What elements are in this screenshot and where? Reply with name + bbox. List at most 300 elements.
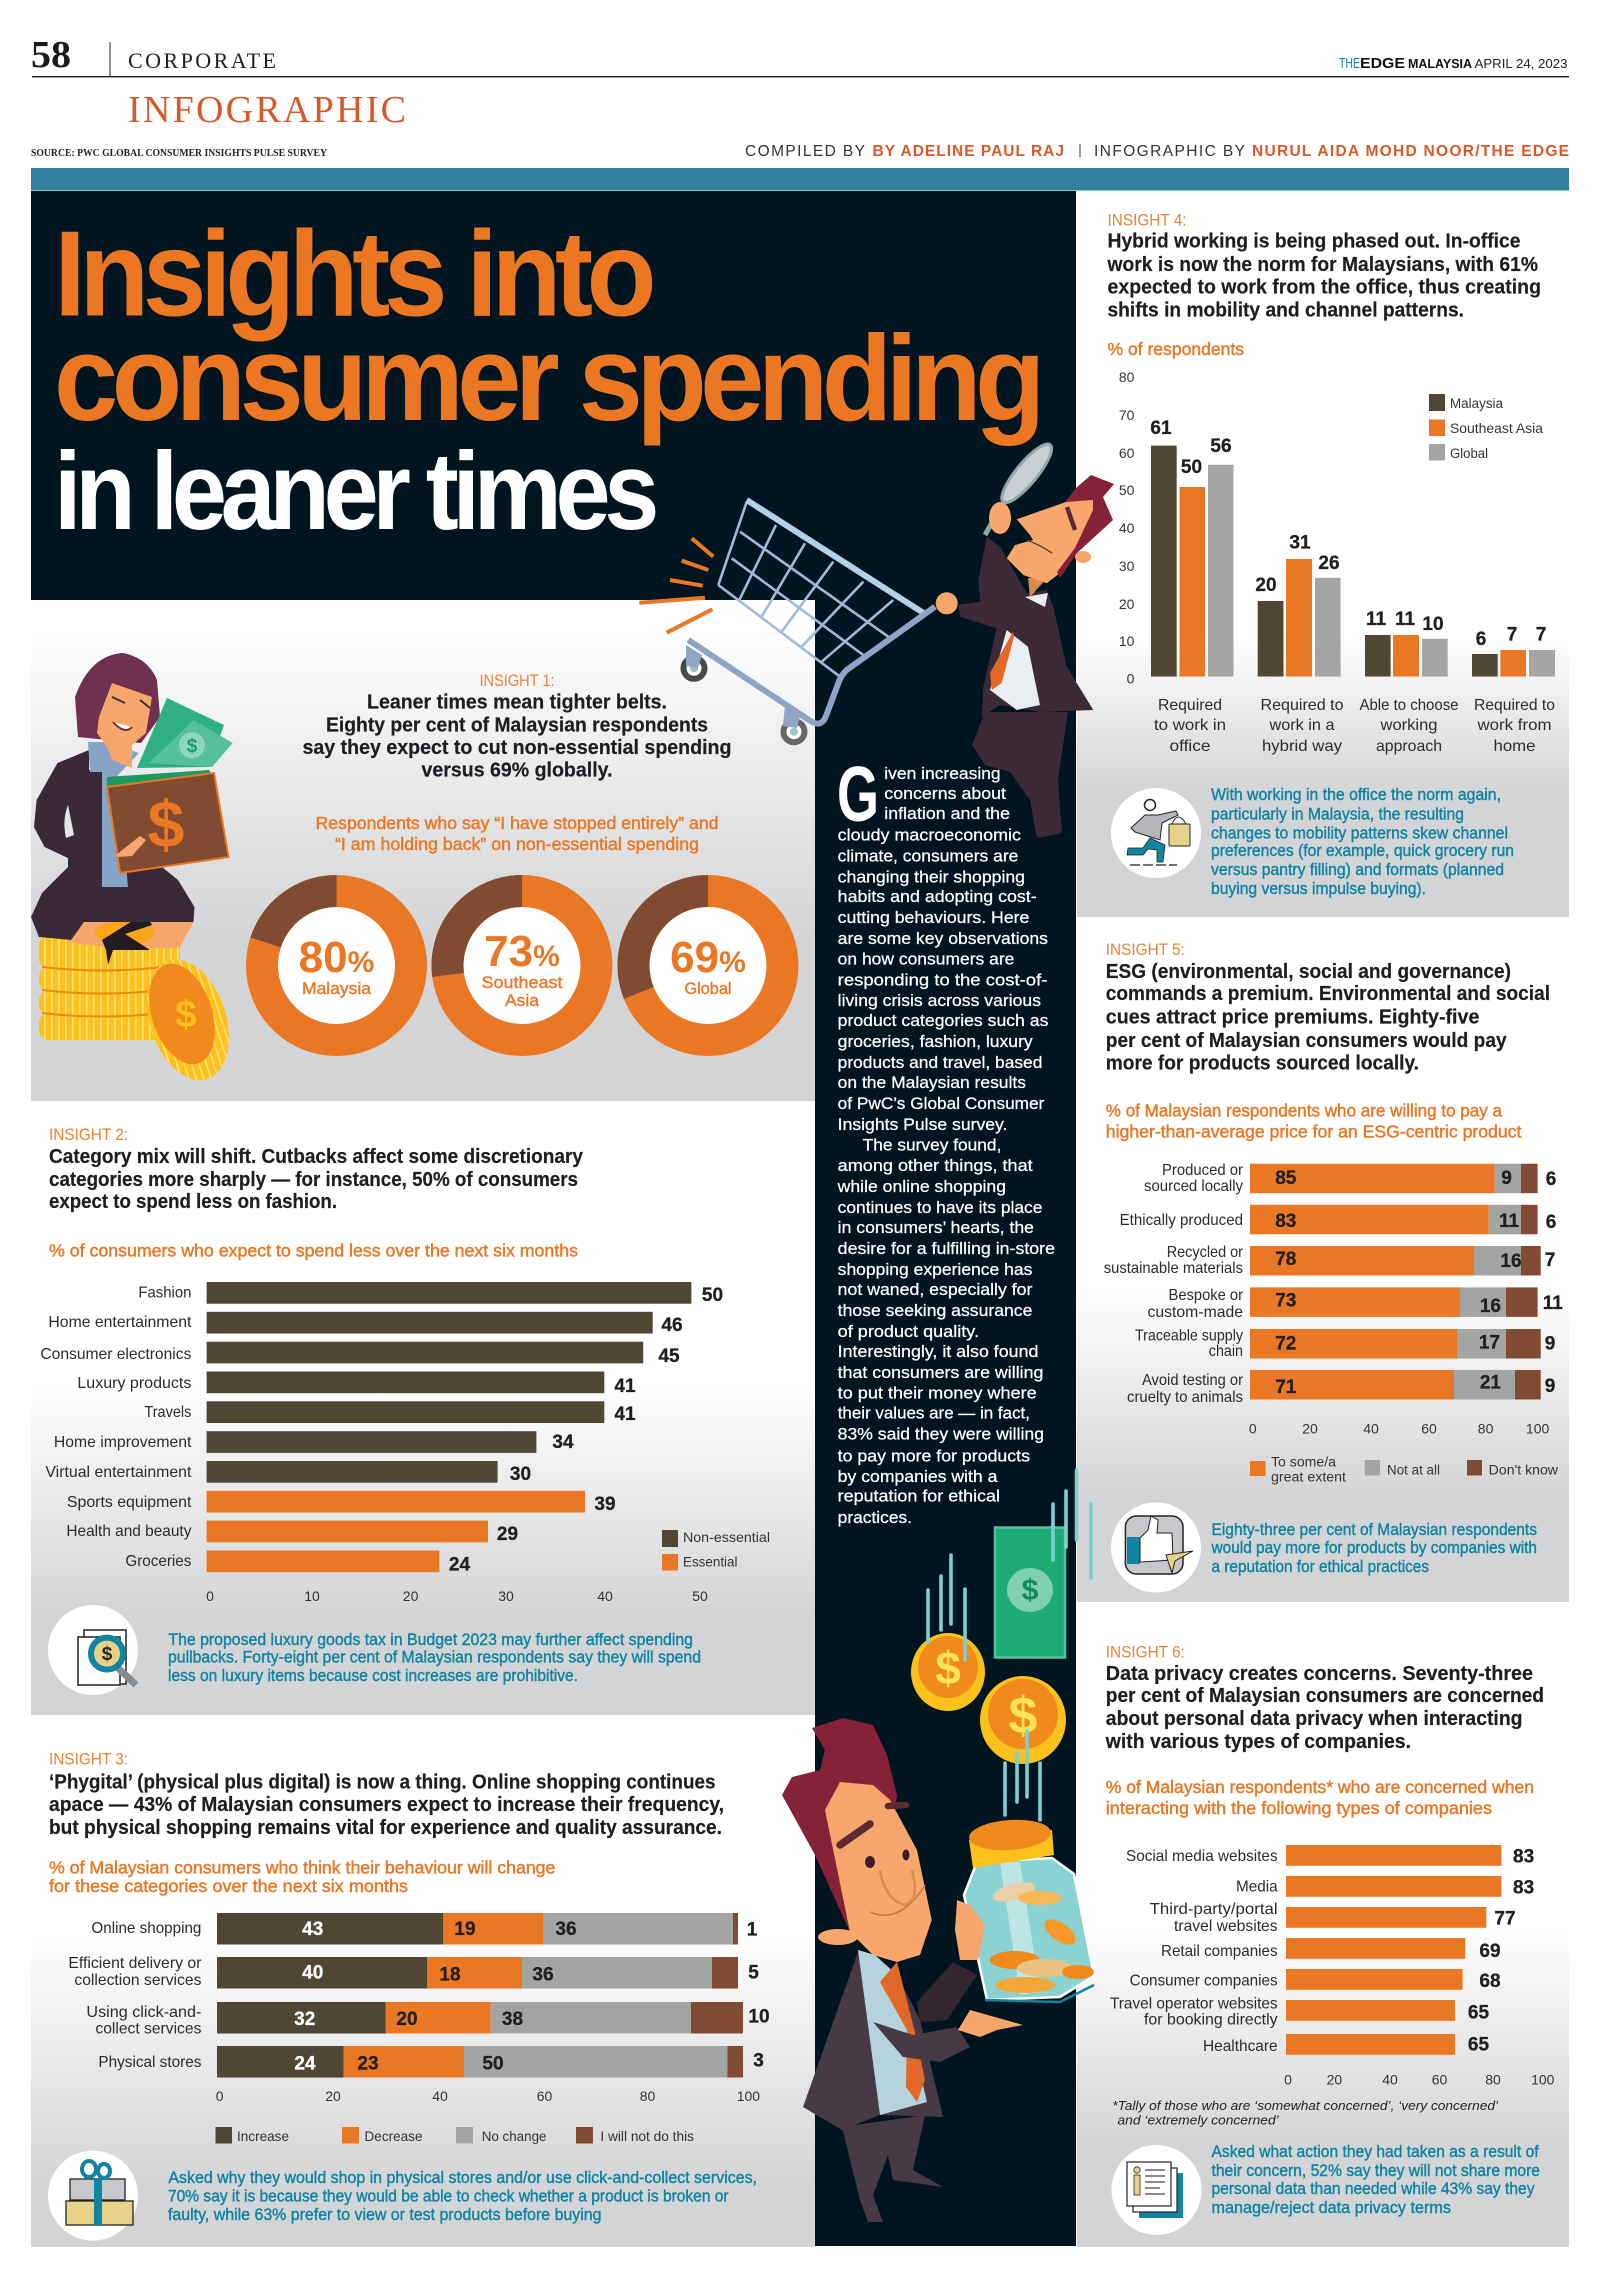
grouped bar chart: work arrangements: work in a [1268, 717, 1335, 734]
centre column article text: those seeking assurance [838, 1301, 1032, 1320]
callout: privacy actions: manage/reject data privacy terms [1212, 2199, 1451, 2217]
stacked bar chart: behaviour change: 24 [294, 2054, 316, 2075]
legend: willingness: Don't know [1489, 1462, 1558, 1478]
stacked bar chart: behaviour change: 0 [216, 2088, 224, 2104]
grouped bar chart: work arrangements: 40 [1119, 520, 1135, 536]
illustration: falling coins [911, 1633, 1066, 1764]
insight 1 heading: say they expect to cut non-essential spending [302, 736, 732, 759]
bar chart: spending cutbacks: 0 [206, 1588, 214, 1604]
main title [54, 206, 1039, 553]
centre column article text: responding to the cost-of- [838, 970, 1047, 989]
callout: physical stores: 70% say it is because they would be able to check whether a product is broken or [168, 2187, 729, 2205]
insight 1 heading: versus 69% globally. [422, 759, 612, 782]
callout: mobility patterns: With working in the office the norm again, [1211, 786, 1501, 804]
bar chart: spending cutbacks: 50 [692, 1588, 708, 1604]
stacked bar chart: ESG price premium: cruelty to animals [1127, 1389, 1243, 1406]
insight 3 heading: apace — 43% of Malaysian consumers expect to increase their frequency, [49, 1793, 724, 1816]
trousers [972, 712, 1068, 838]
grouped bar chart: work arrangements: 11 [1395, 609, 1415, 630]
stacked bar chart: ESG price premium: 9 [1545, 1334, 1555, 1354]
bar chart: spending cutbacks: 41 [614, 1376, 636, 1397]
face [825, 1782, 932, 1962]
stacked bar chart: ESG price premium: 78 [1275, 1249, 1296, 1270]
bar chart: data privacy concern: 69 [1479, 1941, 1501, 1962]
stacked bar chart: behaviour change: 10 [748, 2007, 770, 2028]
insight 4 label: INSIGHT 4: [1108, 211, 1186, 229]
callout: mobility patterns [1211, 786, 1514, 898]
stacked bar chart: ESG price premium: 21 [1480, 1373, 1501, 1394]
panel: insight 1 [31, 601, 815, 1101]
donut: Southeast Asia 73%: 73% [484, 927, 560, 976]
insight 5 heading: ESG (environmental, social and governance) [1106, 960, 1511, 983]
page number: 58 [31, 34, 71, 76]
jar [964, 1817, 1094, 2002]
centre column article text: groceries, fashion, luxury [838, 1032, 1033, 1051]
stacked bar chart: behaviour change: Using click-and- [86, 2004, 201, 2021]
insight 1 heading [302, 691, 732, 782]
centre column article text: on the Malaysian results [838, 1073, 1026, 1092]
legend: behaviour change [216, 2127, 694, 2144]
stacked bar chart: ESG price premium: 83 [1275, 1211, 1296, 1232]
centre column article text: that consumers are willing [838, 1363, 1043, 1382]
insight 1 heading: Leaner times mean tighter belts. [367, 691, 667, 714]
bar chart: spending cutbacks: 34 [552, 1432, 574, 1453]
insight 1 chart title: Respondents who say “I have stopped entirely” and [316, 813, 718, 833]
stacked bar chart: ESG price premium: 16 [1500, 1251, 1522, 1272]
insight 6 label: INSIGHT 6: [1106, 1643, 1185, 1661]
stacked bar chart: behaviour change [68, 1913, 770, 2104]
grouped bar chart: work arrangements: hybrid way [1262, 738, 1342, 755]
bar chart: spending cutbacks: Home entertainment [48, 1314, 192, 1331]
centre column article text: of PwC’s Global Consumer [838, 1094, 1045, 1113]
panel: insight 3 [31, 1716, 815, 2247]
stacked bar chart: ESG price premium: 20 [1302, 1420, 1318, 1436]
bar chart: data privacy concern: 40 [1382, 2071, 1398, 2087]
grouped bar chart: work arrangements: 50 [1181, 457, 1202, 478]
bar chart: spending cutbacks: Luxury products [77, 1375, 191, 1392]
insight 3 heading [49, 1770, 724, 1839]
donut: Southeast Asia 73%: Southeast [482, 973, 563, 992]
bar chart: data privacy concern: Social media websites [1126, 1848, 1278, 1865]
centre column article text: concerns about [884, 784, 1006, 803]
grouped bar chart: work arrangements: home [1494, 738, 1536, 755]
hair [782, 1718, 897, 1932]
bar chart: data privacy concern: 65 [1468, 2003, 1489, 2024]
insight 5 heading: per cent of Malaysian consumers would pay [1106, 1029, 1507, 1052]
suit [31, 750, 194, 940]
bar chart: spending cutbacks: 45 [658, 1346, 680, 1367]
bar chart: spending cutbacks: 20 [403, 1588, 419, 1604]
panel: insight 4 [1077, 191, 1569, 917]
callout: mobility patterns: versus pantry filling) and formats (planned [1211, 861, 1504, 879]
credits line: BY ADELINE PAUL RAJ [872, 143, 1064, 160]
donut: Malaysia 80%: Malaysia [302, 979, 372, 998]
insight 6 chart title: interacting with the following types of companies [1106, 1798, 1492, 1818]
insight 2 label: INSIGHT 2: [49, 1126, 128, 1144]
wallet [107, 770, 214, 795]
bar chart: data privacy concern: Travel operator websites [1110, 1996, 1278, 2012]
stacked bar chart: behaviour change: Online shopping [91, 1920, 201, 1937]
bar chart: data privacy concern: 80 [1485, 2071, 1501, 2087]
insight 5 chart title: higher-than-average price for an ESG-centric product [1106, 1121, 1522, 1141]
stacked bar chart: ESG price premium: 11 [1543, 1293, 1563, 1314]
stacked bar chart: ESG price premium: sustainable materials [1104, 1260, 1243, 1277]
bar chart: data privacy concern: Third-party/portal [1150, 1901, 1278, 1918]
grouped bar chart: work arrangements: 6 [1476, 629, 1486, 650]
illustration: shopping cart [639, 500, 935, 742]
callout: luxury goods tax: The proposed luxury goods tax in Budget 2023 may further affect spending [168, 1631, 693, 1649]
donut: Southeast Asia 73%: Asia [505, 991, 540, 1010]
insight 6 heading: Data privacy creates concerns. Seventy-three [1106, 1662, 1533, 1685]
centre column article text: reputation for ethical [838, 1487, 1000, 1506]
head [1007, 500, 1097, 583]
centre column article text: continues to have its place [838, 1198, 1042, 1217]
centre column article text: cutting behaviours. Here [838, 908, 1029, 927]
stacked bar chart: ESG price premium: 7 [1545, 1250, 1555, 1271]
stacked bar chart: behaviour change: 36 [532, 1964, 554, 1986]
insight 2 heading: categories more sharply — for instance, 50% of consumers [49, 1168, 578, 1191]
stacked bar chart: ESG price premium: 6 [1546, 1169, 1556, 1190]
stacked bar chart: ESG price premium: Ethically produced [1120, 1212, 1243, 1229]
illustration: man with magnifying glass [936, 438, 1114, 838]
stacked bar chart: behaviour change: 18 [439, 1964, 461, 1986]
bar chart: spending cutbacks: Home improvement [54, 1434, 192, 1451]
stacked bar chart: behaviour change: 5 [748, 1963, 759, 1984]
grouped bar chart: work arrangements: 56 [1210, 436, 1232, 457]
illustration: banknote [995, 1528, 1065, 1658]
bar chart: data privacy concern: for booking directly [1144, 2012, 1278, 2029]
stacked bar chart: ESG price premium: 85 [1275, 1168, 1297, 1189]
grouped bar chart: work arrangements: 7 [1536, 625, 1546, 646]
legend: regions: Southeast Asia [1450, 421, 1543, 436]
stacked bar chart: ESG price premium: 16 [1480, 1296, 1501, 1317]
callout: ethical reputation: would pay more for products by companies with [1211, 1539, 1537, 1557]
centre column article text: not waned, especially for [838, 1280, 1033, 1299]
insight 4 heading: work is now the norm for Malaysians, with 61% [1107, 253, 1538, 276]
bar chart: data privacy concern: Retail companies [1161, 1943, 1278, 1960]
hair [75, 653, 160, 743]
grouped bar chart: work arrangements: 61 [1150, 418, 1172, 439]
callout: mobility patterns: preferences (for example, quick grocery run [1211, 842, 1514, 860]
icon: thumbs up with cursor [1111, 1502, 1201, 1592]
centre column article text: by companies with a [838, 1467, 998, 1486]
stacked bar chart: behaviour change: 50 [482, 2054, 504, 2075]
bar chart: data privacy concern: 20 [1327, 2071, 1342, 2087]
insight 2 heading: Category mix will shift. Cutbacks affect some discretionary [49, 1145, 584, 1168]
icon: document with magnifier [48, 1605, 138, 1695]
insight 6 heading: with various types of companies. [1105, 1730, 1411, 1753]
insight 3 chart title: % of Malaysian consumers who think their behaviour will change [49, 1858, 555, 1878]
centre column article text: iven increasing [884, 764, 1001, 783]
stacked bar chart: ESG price premium: sourced locally [1144, 1178, 1243, 1195]
callout: physical stores: Asked why they would shop in physical stores and/or use click-and-collect services, [168, 2169, 757, 2187]
callout: privacy actions: Asked what action they had taken as a result of [1212, 2143, 1539, 2161]
grouped bar chart: work arrangements: 7 [1507, 625, 1517, 646]
footnote: *Tally of those who are ‘somewhat concerned’, ‘very concerned’ [1112, 2098, 1499, 2113]
bar chart: spending cutbacks: Travels [144, 1404, 191, 1421]
bar chart: data privacy concern: Consumer companies [1130, 1973, 1278, 1990]
callout: physical stores [168, 2169, 757, 2224]
centre column article text: shopping experience has [838, 1260, 1032, 1279]
bar chart: spending cutbacks: 30 [510, 1464, 531, 1485]
stacked bar chart: ESG price premium: Traceable supply [1135, 1328, 1243, 1344]
insight 6 heading: per cent of Malaysian consumers are concerned [1106, 1684, 1544, 1707]
insight 3 chart title: for these categories over the next six months [49, 1876, 408, 1896]
header masthead [31, 34, 1569, 160]
centre column article text: product categories such as [838, 1011, 1048, 1030]
insight 4 chart title: % of respondents [1108, 339, 1244, 359]
insight 2 heading [49, 1145, 584, 1213]
stacked bar chart: ESG price premium: 17 [1479, 1333, 1500, 1354]
orange motion lines [639, 538, 713, 633]
tie [880, 1962, 925, 2102]
centre column article text: products and travel, based [838, 1053, 1042, 1072]
insight 1 label: INSIGHT 1: [480, 672, 554, 690]
stacked bar chart: behaviour change: 36 [555, 1919, 577, 1940]
bar chart: spending cutbacks: 10 [304, 1588, 320, 1604]
bar chart: spending cutbacks: 24 [449, 1554, 470, 1576]
legend: behaviour change: Decrease [364, 2128, 423, 2144]
footnote: and ‘extremely concerned’ [1118, 2113, 1280, 2128]
lower arm [873, 2022, 970, 2062]
grouped bar chart: work arrangements: 11 [1366, 609, 1386, 630]
stacked bar chart: behaviour change: 100 [737, 2088, 760, 2104]
bar chart: spending cutbacks: 50 [702, 1285, 723, 1306]
insight 3 chart title [49, 1858, 555, 1896]
insight 5 heading [1106, 960, 1550, 1075]
bar chart: spending cutbacks: 41 [614, 1404, 636, 1425]
bar chart: spending cutbacks: Virtual entertainment [45, 1464, 192, 1481]
insight 1 chart title: “I am holding back” on non-essential spending [335, 834, 699, 854]
centre column article text [837, 750, 1055, 1527]
legend: regions: Global [1450, 446, 1488, 461]
illustration: woman with wallet on coins [31, 653, 243, 1091]
bar chart: spending cutbacks: 29 [497, 1524, 518, 1545]
grouped bar chart: work arrangements: 26 [1318, 553, 1340, 574]
magnifying glass [985, 503, 1003, 535]
masthead date [1339, 55, 1568, 72]
centre column article text: climate, consumers are [838, 846, 1018, 865]
grouped bar chart: work arrangements: 20 [1255, 575, 1277, 596]
insight 3 label: INSIGHT 3: [49, 1751, 128, 1769]
stacked bar chart: behaviour change: 23 [357, 2054, 379, 2075]
grouped bar chart: work arrangements: working [1379, 717, 1438, 734]
donut: Malaysia 80% [243, 872, 430, 1059]
stacked bar chart: behaviour change: 19 [454, 1919, 476, 1940]
legend: essential vs non-essential [662, 1529, 770, 1570]
callout: luxury goods tax: less on luxury items because cost increases are prohibitive. [168, 1667, 578, 1685]
grouped bar chart: work arrangements: approach [1376, 738, 1442, 755]
rolling coin [133, 949, 243, 1091]
stacked bar chart: ESG price premium: 60 [1421, 1420, 1437, 1436]
legend: essential vs non-essential: Non-essential [683, 1529, 770, 1545]
bar chart: data privacy concern: 60 [1432, 2071, 1447, 2087]
centre column article text: Interestingly, it also found [838, 1342, 1038, 1361]
bar chart: spending cutbacks: Health and beauty [66, 1523, 191, 1540]
callout: physical stores: faulty, while 63% prefer to view or test products before buying [168, 2206, 602, 2224]
jacket [958, 537, 1093, 717]
insight 3 heading: ‘Phygital’ (physical plus digital) is now a thing. Online shopping continues [49, 1770, 716, 1794]
grouped bar chart: work arrangements: Required to [1260, 697, 1344, 714]
legend: willingness: Not at all [1387, 1462, 1440, 1478]
icon: running shopper [1111, 788, 1201, 878]
centre column article text: to pay more for products [838, 1446, 1030, 1465]
insight 4 heading: shifts in mobility and channel patterns. [1108, 299, 1464, 322]
stacked bar chart: behaviour change: 40 [302, 1963, 323, 1984]
donut: Global 69%: 69% [670, 933, 746, 982]
callout: ethical reputation [1211, 1521, 1537, 1576]
icon: information document [1112, 2145, 1202, 2235]
grouped bar chart: work arrangements: work from [1476, 717, 1552, 734]
credits line [745, 143, 1569, 160]
illustration: woman with wallet on coins: $ [187, 736, 198, 757]
insight 5 chart title [1106, 1100, 1522, 1141]
stacked bar chart: ESG price premium: 9 [1501, 1168, 1512, 1189]
insight 5 heading: cues attract price premiums. Eighty-five [1106, 1006, 1479, 1029]
illustration: falling coins: $ [935, 1642, 961, 1694]
illustration: falling coins: $ [1009, 1687, 1038, 1745]
legend: willingness: To some/a [1271, 1454, 1337, 1469]
bar chart: data privacy concern: Healthcare [1203, 2038, 1278, 2055]
illustration: woman with wallet on coins: $ [148, 787, 184, 861]
bar chart: spending cutbacks: 30 [498, 1588, 514, 1604]
bar chart: data privacy concern [1110, 1845, 1555, 2087]
grouped bar chart: work arrangements: Required to [1474, 697, 1555, 714]
centre column article text: in consumers’ hearts, the [838, 1218, 1034, 1237]
grouped bar chart: work arrangements: office [1170, 738, 1211, 755]
callout: privacy actions: personal data than needed while 43% say they [1212, 2180, 1535, 2198]
illustration: banknote: $ [1022, 1574, 1039, 1607]
grouped bar chart: work arrangements: 50 [1119, 482, 1135, 498]
stacked bar chart: ESG price premium: custom-made [1148, 1304, 1243, 1321]
grouped bar chart: work arrangements: 0 [1127, 670, 1135, 686]
centre column article text: habits and adopting cost- [838, 887, 1037, 906]
donut: Southeast Asia 73% [439, 882, 605, 1049]
bar chart: spending cutbacks: Sports equipment [67, 1494, 192, 1511]
bar chart: data privacy concern: travel websites [1174, 1918, 1278, 1935]
main title: consumer spending [54, 310, 1039, 446]
credits line: NURUL AIDA MOHD NOOR/THE EDGE [1252, 143, 1569, 160]
donut: Global 69%: Global [684, 979, 732, 998]
grouped bar chart: work arrangements: 80 [1119, 369, 1135, 385]
insight 5 chart title: % of Malaysian respondents who are willing to pay a [1106, 1100, 1502, 1120]
insight 1 heading: Eighty per cent of Malaysian respondents [326, 714, 708, 737]
main title: in leaner times [54, 430, 656, 553]
bar chart: data privacy concern: 100 [1531, 2071, 1555, 2087]
stacked bar chart: behaviour change: 20 [396, 2009, 418, 2030]
teal band [31, 168, 1569, 190]
callout: mobility patterns: buying versus impulse buying). [1211, 880, 1426, 898]
stacked bar chart: behaviour change: 3 [753, 2051, 764, 2072]
insight 2 heading: expect to spend less on fashion. [49, 1190, 337, 1213]
centre column article text: are some key observations [838, 929, 1048, 948]
stacked bar chart: behaviour change: 20 [325, 2088, 341, 2104]
stacked bar chart: behaviour change: 32 [294, 2009, 315, 2030]
masthead date: EDGE [1360, 55, 1405, 72]
masthead date: THE [1339, 55, 1360, 72]
stacked bar chart: behaviour change: 38 [502, 2009, 523, 2030]
stacked bar chart: ESG price premium: 9 [1545, 1376, 1555, 1397]
stacked bar chart: ESG price premium: 72 [1275, 1334, 1296, 1354]
bar chart: data privacy concern: 65 [1468, 2034, 1489, 2056]
donut: Global 69% [611, 869, 805, 1062]
centre column article text: to put their money where [838, 1384, 1037, 1403]
grouped bar chart: work arrangements: Able to choose [1360, 697, 1459, 714]
insight 4 heading: expected to work from the office, thus creating [1108, 275, 1541, 298]
dark hero and centre column background [31, 191, 1076, 2246]
callout: mobility patterns: particularly in Malaysia, the resulting [1211, 805, 1464, 823]
bar chart: spending cutbacks: 39 [594, 1494, 616, 1515]
insight 1 chart title [316, 813, 718, 854]
face [97, 683, 152, 768]
stacked bar chart: ESG price premium: 100 [1526, 1420, 1549, 1436]
stacked bar chart: ESG price premium: 40 [1363, 1420, 1379, 1436]
bar chart: data privacy concern: 77 [1494, 1908, 1516, 1930]
legend: willingness [1250, 1454, 1558, 1485]
grouped bar chart: work arrangements: 70 [1119, 407, 1135, 423]
callout: luxury goods tax: pullbacks. Forty-eight per cent of Malaysian respondents say they will spend [168, 1649, 701, 1667]
bar chart: spending cutbacks: 46 [661, 1315, 683, 1336]
stacked bar chart: behaviour change: collection services [74, 1972, 201, 1989]
centre column article text: living crisis across various [838, 991, 1041, 1010]
stacked bar chart: ESG price premium: 71 [1275, 1377, 1297, 1398]
callout: privacy actions: their concern, 52% say they will not share more [1212, 2162, 1540, 2180]
legend: willingness: great extent [1271, 1470, 1346, 1485]
stacked bar chart: ESG price premium: 80 [1478, 1420, 1494, 1436]
stacked bar chart: behaviour change: 43 [302, 1919, 323, 1940]
bar chart: data privacy concern: 0 [1284, 2071, 1292, 2087]
bar chart: data privacy concern: 83 [1513, 1847, 1534, 1868]
centre column article text: on how consumers are [838, 950, 1014, 968]
legend: regions [1429, 394, 1543, 461]
bar chart: spending cutbacks: Groceries [125, 1553, 191, 1570]
centre column article text: practices. [838, 1508, 912, 1527]
centre column article text: their values are — in fact, [838, 1404, 1030, 1423]
insight 4 heading [1107, 230, 1541, 322]
credits line: COMPILED BY [745, 143, 865, 160]
grouped bar chart: work arrangements: 10 [1119, 633, 1135, 649]
section subtitle: INFOGRAPHIC [128, 89, 406, 131]
bar chart: data privacy concern: Media [1236, 1878, 1278, 1895]
callout: ethical reputation: Eighty-three per cent of Malaysian respondents [1212, 1521, 1537, 1539]
insight 6 chart title [1106, 1777, 1534, 1818]
centre column article text: 83% said they were willing [838, 1424, 1044, 1444]
bar chart: spending cutbacks: Consumer electronics [40, 1346, 191, 1363]
centre column article text: among other things, that [838, 1156, 1033, 1175]
stacked bar chart: ESG price premium: 11 [1499, 1211, 1519, 1232]
grouped bar chart: work arrangements: 30 [1119, 558, 1135, 574]
stacked bar chart: behaviour change: 40 [432, 2088, 448, 2104]
stacked bar chart: ESG price premium: Avoid testing or [1142, 1372, 1244, 1389]
grouped bar chart: work arrangements: 20 [1119, 596, 1135, 612]
callout: privacy actions [1212, 2143, 1540, 2217]
centre column article text: while online shopping [837, 1177, 1006, 1196]
stacked bar chart: behaviour change: 60 [537, 2088, 552, 2104]
insight 3 heading: but physical shopping remains vital for experience and quality assurance. [49, 1816, 722, 1839]
stacked bar chart: ESG price premium: 6 [1546, 1212, 1556, 1233]
insight 5 heading: commands a premium. Environmental and social [1106, 982, 1550, 1005]
trousers [842, 2115, 943, 2222]
grouped bar chart: work arrangements: 10 [1422, 614, 1444, 635]
icon: gift boxes [48, 2151, 138, 2241]
bar chart: spending cutbacks: 40 [597, 1588, 613, 1604]
coin stack [39, 935, 180, 1040]
centre column article text: of product quality. [838, 1322, 979, 1341]
bar chart: spending cutbacks [40, 1282, 723, 1604]
callout: ethical reputation: a reputation for ethical practices [1212, 1558, 1429, 1576]
callout: luxury goods tax [168, 1631, 701, 1685]
insight 4 heading: Hybrid working is being phased out. In-office [1108, 230, 1520, 253]
